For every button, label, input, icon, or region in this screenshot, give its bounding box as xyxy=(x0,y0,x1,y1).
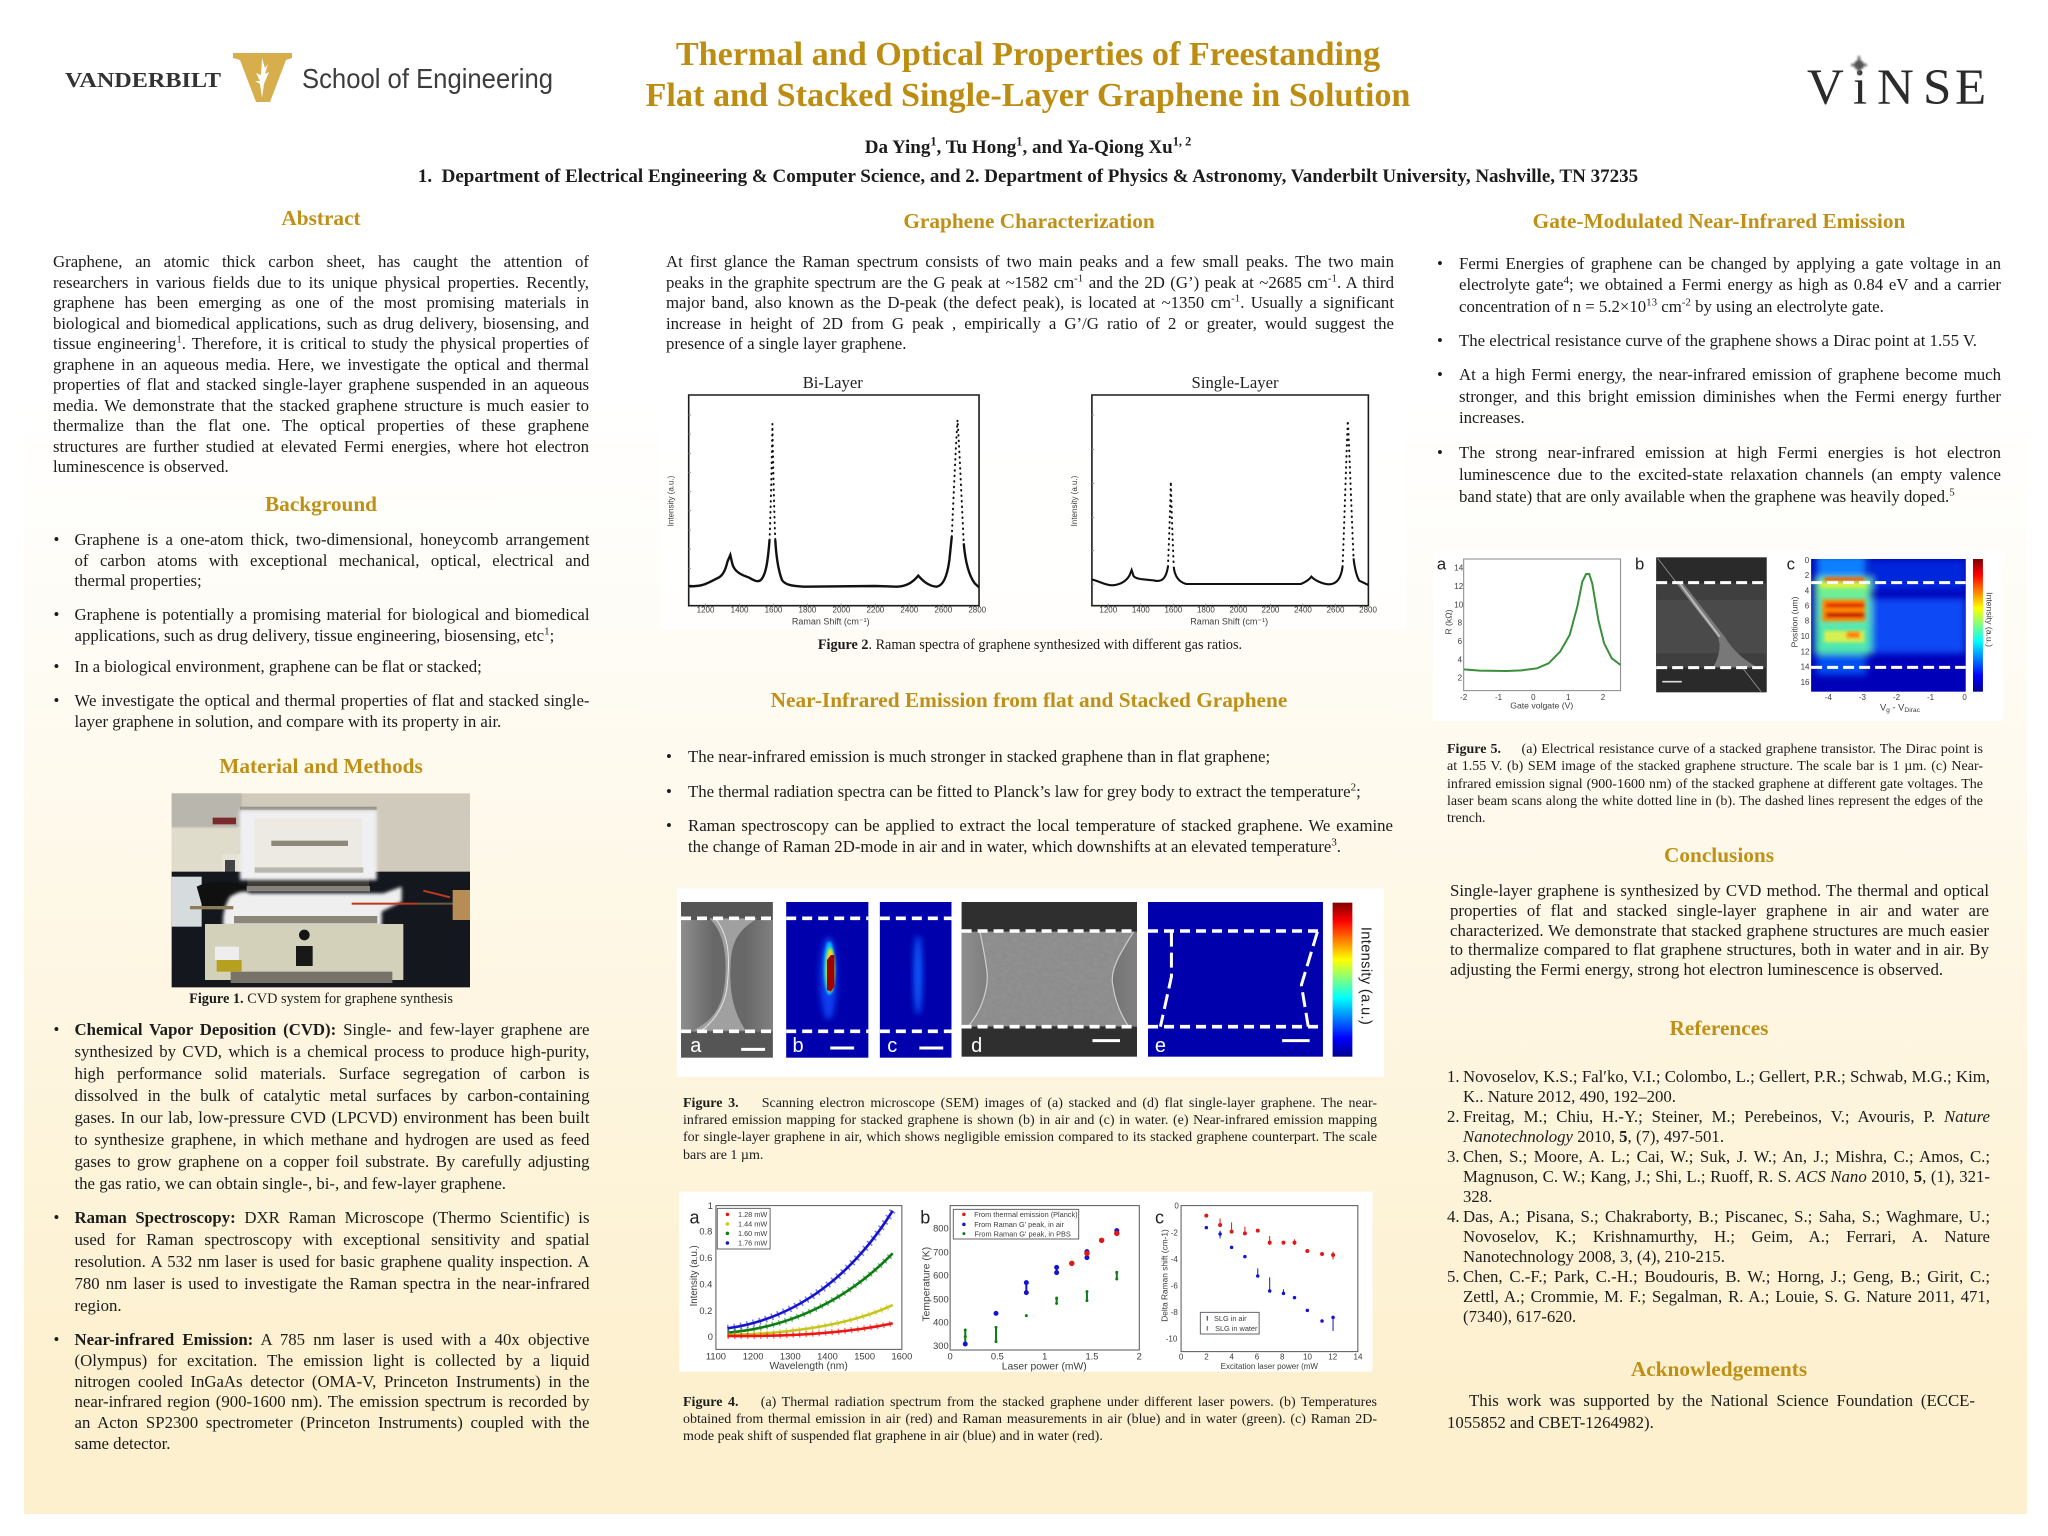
bullet: one-atom thick: Graphene is a one-atom thick, two-dimensional, honeycomb arrangement xyxy=(74,530,590,549)
panel a: stacked graphene SEM xyxy=(681,902,773,1058)
bullet: flat or stacked: In a biological environment, graphene can be flat or stacked; xyxy=(74,657,482,676)
bullet: chemical vapor deposition: gases. In our lab, low-pressure CVD (LPCVD) environment has been built xyxy=(74,1108,590,1127)
title: Flat and Stacked Single-Layer Graphene in Solution xyxy=(646,77,1410,114)
near-infrared bullets: • xyxy=(666,782,672,801)
chart a: thermal radiation spectra: 1.76 mW xyxy=(738,1239,767,1248)
logo: Vanderbilt School of Engineering: VANDERBILT xyxy=(65,68,221,92)
bullet: investigation: layer graphene in solution, and compare with its property in air. xyxy=(74,712,501,730)
chart c: Raman shift vs power: 6 xyxy=(1255,1352,1260,1361)
photo: CVD system xyxy=(172,793,470,988)
abstract text: media. We demonstrate that the stacked graphene structure is much easier to xyxy=(53,396,589,414)
chart b: temperature vs laser power: 0 xyxy=(948,1351,953,1361)
bullet: one-atom thick: of carbon atoms with exceptional mechanical, optical, electrical and xyxy=(74,550,590,570)
chart c: Raman shift vs power: -10 xyxy=(1166,1335,1178,1344)
caption: figure 1: Figure 1. CVD system for graphene synthesis xyxy=(189,991,453,1007)
figure 4: thermal charts xyxy=(679,1192,1372,1372)
bullet: Raman spectroscopy: Raman Spectroscopy: DXR Raman Microscope (Thermo Scientific) is xyxy=(74,1208,590,1227)
reference 3: Chen, S.; Moore, A. L.; Cai, W.; Suk, J. W.; An, J.; Mishra, C.; Amos, C.; xyxy=(1463,1147,1990,1166)
chart a: thermal radiation spectra: 1.44 mW xyxy=(738,1220,767,1229)
references list: 3. xyxy=(1447,1147,1460,1166)
caption: figure 4: obtained from thermal emission in air (red) and Raman measurements in air (blue) and in water (green). (c) Raman 2D- xyxy=(683,1412,1377,1427)
panel e: flat graphene emission map xyxy=(1148,902,1323,1057)
logo: VINSE: ViNSE xyxy=(1807,60,1986,116)
characterization paragraph: increase in height of 2D from G peak , empirically a G’/G ratio of 2 or greater, would suggest the xyxy=(666,314,1394,332)
tick labels, axis titles: Intensity (a.u.) xyxy=(1070,475,1079,526)
bullet: one-atom thick xyxy=(54,530,590,590)
bullet: chemical vapor deposition: Chemical Vapor Deposition (CVD): Single- and few-layer graphene are xyxy=(74,1020,590,1039)
tick labels, axis titles: 1400 xyxy=(731,605,749,614)
chart a: resistance curve: Gate volgate (V) xyxy=(1510,701,1573,711)
chart c: near-infrared emission map: -3 xyxy=(1859,693,1867,702)
chart a: thermal radiation spectra: 1300 xyxy=(780,1351,801,1361)
chart a: thermal radiation spectra: 0.8 xyxy=(699,1227,712,1237)
bullet: chemical vapor deposition: to synthesize graphene, in which methane and hydrogen are used as feed xyxy=(74,1130,590,1149)
title xyxy=(646,36,1410,114)
tick labels, axis titles: 1800 xyxy=(1197,605,1215,614)
abstract text: graphene has been emerging as one of the most promising materials in xyxy=(53,293,589,312)
bullet: high Fermi energy: stronger, and this bright emission diminishes when the Fermi energy further xyxy=(1459,387,2001,406)
caption: figure 5 xyxy=(1447,742,1983,826)
bullet: biological material xyxy=(54,605,590,644)
chart b: temperature vs laser power: 700 xyxy=(933,1247,949,1257)
chart a: resistance curve: 10 xyxy=(1454,600,1464,609)
bullet: high Fermi energy: At a high Fermi energy, the near-infrared emission of graphene become much xyxy=(1459,365,2001,384)
chart a: resistance curve: -2 xyxy=(1460,693,1468,702)
panel c: emission map in water: c xyxy=(887,1035,897,1057)
caption: figure 5: Figure 5. (a) Electrical resistance curve of a stacked graphene transistor. The Dirac point is xyxy=(1447,742,1983,757)
panel b: emission map in air: b xyxy=(793,1035,804,1057)
tick labels, axis titles: 1200 xyxy=(1099,605,1118,614)
panel d: flat graphene SEM xyxy=(962,902,1137,1057)
bullet: Raman temperature: the change of Raman 2D-mode in air and in water, which downshifts at an elevated temperature3. xyxy=(688,836,1341,856)
caption: figure 4 xyxy=(683,1395,1377,1444)
caption: figure 3: for single-layer graphene in air, which shows negligible emission compared to its stacked graphene counterpart. The scale xyxy=(683,1130,1377,1145)
caption: figure 5: laser beam scans along the white dotted line in (b). The dashed lines represent the edges of the xyxy=(1447,794,1983,809)
bullet: investigation xyxy=(54,691,590,730)
chart c: Raman shift vs power: Delta Raman shift (cm-1) xyxy=(1160,1229,1170,1322)
tick labels, axis titles: 1800 xyxy=(799,605,817,614)
chart c: near-infrared emission map: -2 xyxy=(1893,693,1901,702)
bullet: chemical vapor deposition: gases to grow graphene on a copper foil substrate. By carefully adjusting xyxy=(74,1152,590,1171)
near-infrared bullets xyxy=(666,747,1393,856)
panel b: emission map in air xyxy=(786,902,868,1058)
abstract text: Graphene, an atomic thick carbon sheet, has caught the attention of xyxy=(53,252,589,271)
tick labels, axis titles: Intensity (a.u.) xyxy=(666,475,675,526)
bullet: Fermi energies: concentration of n = 5.2×1013 cm-2 by using an electrolyte gate. xyxy=(1459,296,1884,316)
chart c: near-infrared emission map: 4 xyxy=(1805,586,1810,595)
caption: figure 3 xyxy=(683,1096,1377,1163)
reference 4: Nanotechnology 2008, 3, (4), 210-215. xyxy=(1463,1247,1725,1266)
panel d: flat graphene SEM: d xyxy=(971,1035,982,1057)
bullet: Planck fit: The thermal radiation spectra can be fitted to Planck’s law for grey body to extract the temperature2; xyxy=(688,781,1361,801)
conclusions text: to thermalize compared to flat graphene structures, both in water and in air. By xyxy=(1450,940,1989,959)
tick labels, axis titles: 1600 xyxy=(1164,605,1183,614)
chart a: resistance curve xyxy=(1437,554,1621,711)
chart b: temperature vs laser power xyxy=(920,1206,1142,1372)
conclusions text xyxy=(1450,881,1989,979)
logo: Vanderbilt School of Engineering: School of Engineering xyxy=(302,63,553,94)
affiliations: 1. Department of Electrical Engineering & Computer Science, and 2. Department of Physics & Astronomy, Vanderbilt University, Nashville, TN 37235 xyxy=(418,166,1638,187)
chart a: thermal radiation spectra: 1100 xyxy=(706,1351,726,1361)
reference 3 xyxy=(1447,1147,1990,1206)
bullet: high Fermi energy xyxy=(1437,365,2001,427)
abstract text: tissue engineering1. Therefore, it is critical to study the physical properties of xyxy=(53,333,589,353)
gate-modulated bullets xyxy=(1437,254,2001,506)
chart c: Raman shift vs power: -6 xyxy=(1171,1282,1178,1291)
abstract text xyxy=(53,252,589,476)
gate-modulated bullets: • xyxy=(1437,254,1443,272)
chart c: near-infrared emission map: 6 xyxy=(1805,602,1810,611)
characterization paragraph: peaks in the graphite spectrum are the G peak at ~1582 cm-1 and the 2D (G’) peak at ~2685 cm-1. A third xyxy=(666,272,1394,292)
conclusions text: properties of flat and stacked single-layer graphene in air and water are xyxy=(1450,901,1989,920)
chart a: resistance curve: 0 xyxy=(1531,693,1536,702)
chart b: temperature vs laser power: 1.5 xyxy=(1086,1351,1098,1361)
chart a: thermal radiation spectra: Wavelength (nm) xyxy=(770,1361,848,1372)
bullet: chemical vapor deposition: dissolved in the bulk of catalytic metal surfaces by carbon-containing xyxy=(74,1086,590,1105)
chart c: Raman shift vs power: 14 xyxy=(1354,1352,1363,1361)
tick labels, axis titles: 1200 xyxy=(697,605,715,614)
heading: Acknowledgements: Acknowledgements xyxy=(1631,1357,1807,1381)
chart c: near-infrared emission map: 16 xyxy=(1801,678,1810,687)
caption: figure 3: Figure 3. Scanning electron microscope (SEM) images of (a) stacked and (d) flat single-layer graphene. The near- xyxy=(683,1096,1377,1111)
bullet: chemical vapor deposition: synthesized by CVD, which is a chemical process to produce high-purity, xyxy=(74,1042,590,1061)
chart c: Raman shift vs power: -2 xyxy=(1171,1228,1178,1237)
chart b: temperature vs laser power: 2 xyxy=(1137,1351,1142,1361)
tick labels, axis titles: 2400 xyxy=(1294,605,1312,614)
plot title: Single-Layer: Single-Layer xyxy=(1192,373,1279,392)
bullet: Raman spectroscopy: used for Raman spectroscopy with exceptional sensitivity and spatial xyxy=(74,1230,590,1249)
tick labels, axis titles: Raman Shift (cm⁻¹) xyxy=(792,617,870,627)
references list: 2. xyxy=(1447,1107,1460,1126)
chart b: temperature vs laser power: From Raman G' peak, in PBS xyxy=(975,1229,1071,1238)
chart c: Raman shift vs power: 12 xyxy=(1328,1352,1338,1361)
plot title: Bi-Layer: Bi-Layer xyxy=(803,373,863,392)
colour bar: Intensity (a.u.) xyxy=(1358,927,1374,1025)
heading: Material and Methods: Material and Methods xyxy=(219,754,423,778)
bullet: Fermi energies xyxy=(1437,254,2001,316)
reference 5: Zettl, A.; Crommie, M. F.; Segalman, R. A.; Louie, S. G. Nature 2011, 471, xyxy=(1463,1287,1990,1306)
bullet: investigation: We investigate the optical and thermal properties of flat and stacked single- xyxy=(74,691,590,710)
caption: figure 5: infrared emission signal (900-1600 nm) of the stacked graphene at different gate voltages. The xyxy=(1447,777,1983,792)
methods bullets: • xyxy=(54,1208,59,1227)
methods bullets: • xyxy=(54,1330,59,1349)
reference 4: Das, A.; Pisana, S.; Chakraborty, B.; Piscanec, S.; Saha, S.; Waghmare, U.; xyxy=(1463,1207,1990,1226)
chart b: temperature vs laser power: 1 xyxy=(1042,1351,1047,1361)
chart c: near-infrared emission map: V xyxy=(1880,703,1886,713)
references list: 5. xyxy=(1447,1267,1460,1286)
colour bar xyxy=(1333,903,1374,1057)
chart c: Raman shift vs power: c xyxy=(1155,1207,1164,1227)
bullet: hot electron luminescence: The strong near-infrared emission at high Fermi energies is hot electron xyxy=(1459,443,2001,462)
chart c: near-infrared emission map: 8 xyxy=(1805,617,1810,626)
tick labels, axis titles: 2000 xyxy=(1230,605,1248,614)
tick labels, axis titles: 2800 xyxy=(968,605,987,614)
chart c: Raman shift vs power: -8 xyxy=(1171,1308,1178,1317)
acknowledgements text: 1055852 and CBET-1264982). xyxy=(1447,1412,1654,1432)
references list: 1. xyxy=(1447,1067,1460,1086)
chart c: near-infrared emission map xyxy=(1787,554,1994,714)
conclusions text: Single-layer graphene is synthesized by CVD method. The thermal and optical xyxy=(1450,881,1989,900)
abstract text: structures are further studied at elevated Fermi energies, where hot electron xyxy=(53,436,589,456)
bullet: Dirac point: The electrical resistance curve of the graphene shows a Dirac point at 1.55 V. xyxy=(1459,331,1977,350)
bullet: near-infrared emission xyxy=(54,1330,590,1453)
chart a: resistance curve: -1 xyxy=(1495,693,1503,702)
figure 3: SEM and emission maps xyxy=(677,592,1993,1077)
chart c: Raman shift vs power: SLG in air xyxy=(1214,1314,1247,1323)
heading: Gate-Modulated Near-Infrared Emission: Gate-Modulated Near-Infrared Emission xyxy=(1533,209,1905,233)
tick labels, axis titles: 2200 xyxy=(866,605,885,614)
chart c: near-infrared emission map: Position (um) xyxy=(1789,596,1799,648)
chart b: temperature vs laser power: From thermal emission (Planck) xyxy=(974,1210,1078,1219)
chart c: near-infrared emission map: 10 xyxy=(1801,632,1810,641)
figure 2: Raman spectra xyxy=(666,373,1377,627)
chart c: near-infrared emission map: 14 xyxy=(1801,663,1810,672)
chart a: resistance curve: 4 xyxy=(1458,655,1463,664)
figure 5: gate-modulated charts xyxy=(1433,554,2003,721)
caption: figure 5: trench. xyxy=(1447,811,1485,826)
bullet: Fermi energies: Fermi Energies of graphene can be changed by applying a gate voltage in an xyxy=(1459,254,2001,272)
reference 2 xyxy=(1447,1107,1990,1146)
bullet: one-atom thick: thermal properties; xyxy=(74,571,202,590)
bullet: Raman spectroscopy xyxy=(54,1208,590,1315)
bullet: near-infrared emission: an Acton SP2300 spectrometer (Princeton Instruments) coupled with the xyxy=(74,1413,590,1432)
background bullets: • xyxy=(54,657,59,676)
references list: 4. xyxy=(1447,1207,1460,1226)
chart b: temperature vs laser power: 500 xyxy=(933,1294,949,1304)
panel a: stacked graphene SEM: a xyxy=(690,1035,702,1057)
abstract text: luminescence is observed. xyxy=(53,457,229,476)
chart b: temperature vs laser power: Temperature (K) xyxy=(922,1247,933,1321)
reference 2: Nanotechnology 2010, 5, (7), 497-501. xyxy=(1463,1127,1724,1146)
chart: Single-Layer spectrum xyxy=(1092,395,1368,606)
abstract text: graphene in an aqueous media. Here, we investigate the optical and thermal xyxy=(53,354,589,374)
background bullets: • xyxy=(54,530,59,549)
heading: Abstract: Abstract xyxy=(281,206,361,230)
tick labels, axis titles: 2800 xyxy=(1359,605,1377,614)
chart c: near-infrared emission map: 2 xyxy=(1805,571,1810,580)
heading: Background: Background xyxy=(265,492,377,516)
chart a: resistance curve: a xyxy=(1437,554,1447,573)
bullet: Raman spectroscopy: region. xyxy=(74,1296,122,1315)
chart a: resistance curve: 8 xyxy=(1458,619,1463,628)
reference 5: Chen, C.-F.; Park, C.-H.; Boudouris, B. W.; Horng, J.; Geng, B.; Girit, C.; xyxy=(1463,1267,1990,1286)
chart c: Raman shift vs power: 0 xyxy=(1174,1202,1179,1211)
heading: Near-Infrared Emission: Near-Infrared Emission from flat and Stacked Graphene xyxy=(771,688,1287,712)
title: Thermal and Optical Properties of Freestanding xyxy=(676,36,1380,73)
chart b: temperature vs laser power: 600 xyxy=(933,1271,949,1281)
abstract text: biological and biomedical applications, such as drug delivery, biosensing, and xyxy=(53,314,589,332)
reference 2: Freitag, M.; Chiu, H.-Y.; Steiner, M.; Perebeinos, V.; Avouris, P. Nature xyxy=(1463,1107,1990,1126)
tick labels, axis titles: Raman Shift (cm⁻¹) xyxy=(1190,617,1268,627)
bullet: stacked stronger: The near-infrared emission is much stronger in stacked graphene than in flat graphene; xyxy=(688,747,1270,766)
panel e: flat graphene emission map: e xyxy=(1155,1035,1166,1057)
tick labels, axis titles: 2600 xyxy=(934,605,953,614)
chart a: resistance curve: 1 xyxy=(1566,693,1571,702)
reference 1 xyxy=(1447,1067,1990,1106)
gate-modulated bullets: • xyxy=(1437,331,1443,350)
chart b: temperature vs laser power: 800 xyxy=(933,1224,949,1234)
chart a: thermal radiation spectra: 0.2 xyxy=(699,1306,712,1316)
bullet: Raman spectroscopy: 780 nm laser is used to investigate the Raman spectra in the near-infrared xyxy=(74,1274,590,1293)
abstract text: thermalize than the flat one. The optical properties of these graphene xyxy=(53,416,589,435)
bullet: chemical vapor deposition: the gas ratio, we can obtain single-, bi-, and few-layer graphene. xyxy=(74,1174,506,1193)
chart a: resistance curve: 12 xyxy=(1454,582,1464,591)
caption: figure 4: mode peak shift of suspended flat graphene in air (blue) and in water (red). xyxy=(683,1429,1103,1444)
chart a: thermal radiation spectra: 0.4 xyxy=(699,1279,712,1289)
chart a: thermal radiation spectra xyxy=(689,1201,912,1372)
tick labels, axis titles: 2600 xyxy=(1327,605,1345,614)
chart c: Raman shift vs power: SLG in water xyxy=(1215,1324,1258,1333)
characterization paragraph: At first glance the Raman spectrum consists of two main peaks and a few small peaks. The two main xyxy=(666,252,1394,271)
tick labels, axis titles: 2000 xyxy=(833,605,851,614)
methods bullets xyxy=(54,1020,590,1453)
caption: figure 4: Figure 4. (a) Thermal radiation spectrum from the stacked graphene under different laser powers. (b) Temperatures xyxy=(683,1395,1377,1410)
acknowledgements text: This work was supported by the National Science Foundation (ECCE- xyxy=(1469,1391,1975,1410)
reference 5: (7340), 617-620. xyxy=(1463,1307,1576,1326)
logo: Vanderbilt School of Engineering xyxy=(65,53,553,102)
background bullets: • xyxy=(54,605,59,624)
abstract text: researchers in various fields due to its unique physical properties. Recently, xyxy=(53,272,589,292)
chart a: thermal radiation spectra: 1 xyxy=(708,1201,713,1211)
chart c: near-infrared emission map: Dirac xyxy=(1904,707,1921,714)
bullet: hot electron luminescence: band state) that are only available when the graphene was heavily doped.5 xyxy=(1459,486,1955,506)
reference 1: K.. Nature 2012, 490, 192–200. xyxy=(1463,1087,1676,1106)
gate-modulated bullets: • xyxy=(1437,443,1443,462)
references list xyxy=(1447,1067,1990,1326)
methods bullets: • xyxy=(54,1020,59,1039)
authors: Da Ying1, Tu Hong1, and Ya-Qiong Xu1, 2 xyxy=(865,135,1191,158)
panel c: emission map in water xyxy=(880,902,951,1058)
caption: figure 5: at 1.55 V. (b) SEM image of the stacked graphene structure. The scale bar is 1 µm. (c) Near- xyxy=(1447,759,1983,774)
characterization paragraph: presence of a single layer graphene. xyxy=(666,334,906,353)
characterization paragraph: major band, also known as the D-peak (the defect peak), is located at ~1350 cm-1. Usually a significant xyxy=(666,292,1394,312)
chart a: thermal radiation spectra: 0.6 xyxy=(699,1253,712,1263)
bullet: Raman spectroscopy: resolution. A 532 nm laser is used for basic graphene quality inspection. A xyxy=(74,1252,590,1271)
chart: Bi-Layer spectrum xyxy=(689,395,979,606)
acknowledgements text xyxy=(1447,1391,1975,1432)
chart a: resistance curve: 6 xyxy=(1458,637,1463,646)
reference 3: Magnuson, C. W.; Kang, J.; Shi, L.; Ruoff, R. S. ACS Nano 2010, 5, (1), 321- xyxy=(1463,1167,1990,1186)
bullet: near-infrared emission: Near-infrared Emission: A 785 nm laser is used with a 40x objective xyxy=(74,1330,589,1349)
chart c: near-infrared emission map: -4 xyxy=(1825,693,1832,702)
chart c: near-infrared emission map: 12 xyxy=(1801,647,1810,656)
chart b: temperature vs laser power: Laser power (mW) xyxy=(1002,1361,1087,1372)
reference 3: 328. xyxy=(1463,1187,1492,1206)
chart c: near-infrared emission map: c xyxy=(1787,554,1795,573)
chart c: Raman shift vs power: 0 xyxy=(1179,1352,1184,1361)
caption: figure 3: bars are 1 µm. xyxy=(683,1148,763,1163)
chart a: thermal radiation spectra: Intensity (a.u.) xyxy=(689,1245,700,1306)
chart b: temperature vs laser power: 0.5 xyxy=(991,1351,1004,1361)
chart a: resistance curve: 2 xyxy=(1458,674,1463,683)
chart a: thermal radiation spectra: 1.28 mW xyxy=(738,1210,767,1219)
heading: Graphene Characterization: Graphene Characterization xyxy=(903,209,1155,233)
chart a: thermal radiation spectra: 1200 xyxy=(743,1351,763,1361)
bullet: Raman temperature xyxy=(666,816,1393,856)
chart a: thermal radiation spectra: a xyxy=(690,1207,701,1227)
background bullets: • xyxy=(54,691,59,710)
bullet: high Fermi energy: increases. xyxy=(1459,408,1525,427)
chart c: Raman shift vs power: 8 xyxy=(1280,1352,1285,1361)
tick labels, axis titles: 2400 xyxy=(900,605,919,614)
background bullets xyxy=(54,530,590,730)
chart b: temperature vs laser power: b xyxy=(920,1207,930,1227)
chart c: Raman shift vs power: Excitation laser power (mW xyxy=(1221,1362,1318,1371)
reference 4: Novoselov, K.; Krishnamurthy, H.; Geim, A.; Ferrari, A. Nature xyxy=(1463,1227,1990,1246)
chart c: Raman shift vs power: 4 xyxy=(1229,1352,1234,1361)
heading: Conclusions: Conclusions xyxy=(1664,843,1774,867)
bullet: biological material: Graphene is potentially a promising material for biological and biomedical xyxy=(74,605,590,624)
chart a: thermal radiation spectra: 1600 xyxy=(892,1351,912,1361)
tick labels, axis titles xyxy=(666,475,1377,627)
near-infrared bullets: • xyxy=(666,747,672,766)
chart c: Raman shift vs power: 10 xyxy=(1303,1352,1312,1361)
chart c: near-infrared emission map: g xyxy=(1886,707,1890,714)
bullet: near-infrared emission: nitrogen cooled InGaAs detector (OMA-V, Princeton Instruments) in the xyxy=(74,1372,590,1391)
chart a: resistance curve: 2 xyxy=(1601,693,1606,702)
chart a: thermal radiation spectra: 0 xyxy=(708,1332,713,1342)
heading: References: References xyxy=(1670,1016,1768,1040)
chart c: Raman shift vs power xyxy=(1155,1202,1363,1371)
panel b: SEM image: b xyxy=(1635,554,1644,573)
chart a: resistance curve: R (kΩ) xyxy=(1443,609,1453,635)
bullet: chemical vapor deposition: high performance solid materials. Surface segregation of carbon is xyxy=(74,1064,590,1083)
abstract text: properties of flat and stacked single-layer graphene suspended in an aqueous xyxy=(53,375,589,394)
reference 1: Novoselov, K.S.; Fal′ko, V.I.; Colombo, L.; Gellert, P.R.; Schwab, M.G.; Kim, xyxy=(1463,1067,1990,1086)
tick labels, axis titles: 1400 xyxy=(1132,605,1150,614)
chart c: near-infrared emission map: Intensity (a.u.) xyxy=(1984,592,1994,647)
tick labels, axis titles: 1600 xyxy=(765,605,783,614)
chart c: near-infrared emission map: 0 xyxy=(1962,693,1967,702)
reference 5 xyxy=(1447,1267,1990,1326)
reference 4 xyxy=(1447,1207,1990,1266)
conclusions text: characterized. We demonstrate that stacked graphene structures are much easier xyxy=(1450,920,1989,940)
caption: figure 2: Figure 2. Raman spectra of graphene synthesized with different gas ratios. xyxy=(818,637,1242,653)
tick labels, axis titles: 2200 xyxy=(1262,605,1280,614)
chart c: near-infrared emission map: - V xyxy=(1890,703,1905,713)
panel b: SEM image xyxy=(1635,554,1767,692)
chart c: near-infrared emission map: -1 xyxy=(1927,693,1935,702)
chart c: near-infrared emission map: 0 xyxy=(1805,556,1810,565)
bullet: chemical vapor deposition xyxy=(54,1020,590,1193)
bullet: near-infrared emission: near-infrared region (900-1600 nm). The emission spectrum is recorded by xyxy=(74,1392,590,1411)
conclusions text: adjusting the Fermi energy, strong hot electron luminescence is observed. xyxy=(1450,960,1943,979)
caption: figure 3: infrared emission mapping for stacked graphene is shown (b) in air and (c) in water. (e) Near-infrared emission mapping xyxy=(683,1113,1377,1128)
bullet: near-infrared emission: (Olympus) for excitation. The emission light is collected by a liquid xyxy=(74,1351,590,1370)
bullet: Fermi energies: electrolyte gate4; we obtained a Fermi energy as high as 0.84 eV and a carrier xyxy=(1459,275,2001,294)
chart b: temperature vs laser power: 300 xyxy=(933,1341,949,1351)
chart c: Raman shift vs power: 2 xyxy=(1204,1352,1209,1361)
bullet: near-infrared emission: same detector. xyxy=(74,1434,170,1453)
bullet: biological material: applications, such as drug delivery, tissue engineering, biosensing, etc1; xyxy=(74,625,554,644)
chart a: thermal radiation spectra: 1.60 mW xyxy=(738,1229,767,1238)
chart a: resistance curve: 14 xyxy=(1454,564,1464,573)
chart b: temperature vs laser power: 400 xyxy=(933,1318,949,1328)
near-infrared bullets: • xyxy=(666,816,672,835)
bullet: hot electron luminescence: luminescence due to the excited-state relaxation channels (an empty valence xyxy=(1459,465,2001,484)
characterization paragraph xyxy=(666,252,1394,353)
chart b: temperature vs laser power: From Raman G' peak, in air xyxy=(974,1220,1065,1229)
chart c: Raman shift vs power: -4 xyxy=(1171,1255,1178,1264)
chart a: thermal radiation spectra: 1500 xyxy=(854,1351,875,1361)
gate-modulated bullets: • xyxy=(1437,365,1443,384)
bullet: Raman temperature: Raman spectroscopy can be applied to extract the local temperature of stacked graphene. We examine xyxy=(688,816,1393,835)
chart a: thermal radiation spectra: 1400 xyxy=(817,1351,838,1361)
bullet: hot electron luminescence xyxy=(1437,443,2001,506)
